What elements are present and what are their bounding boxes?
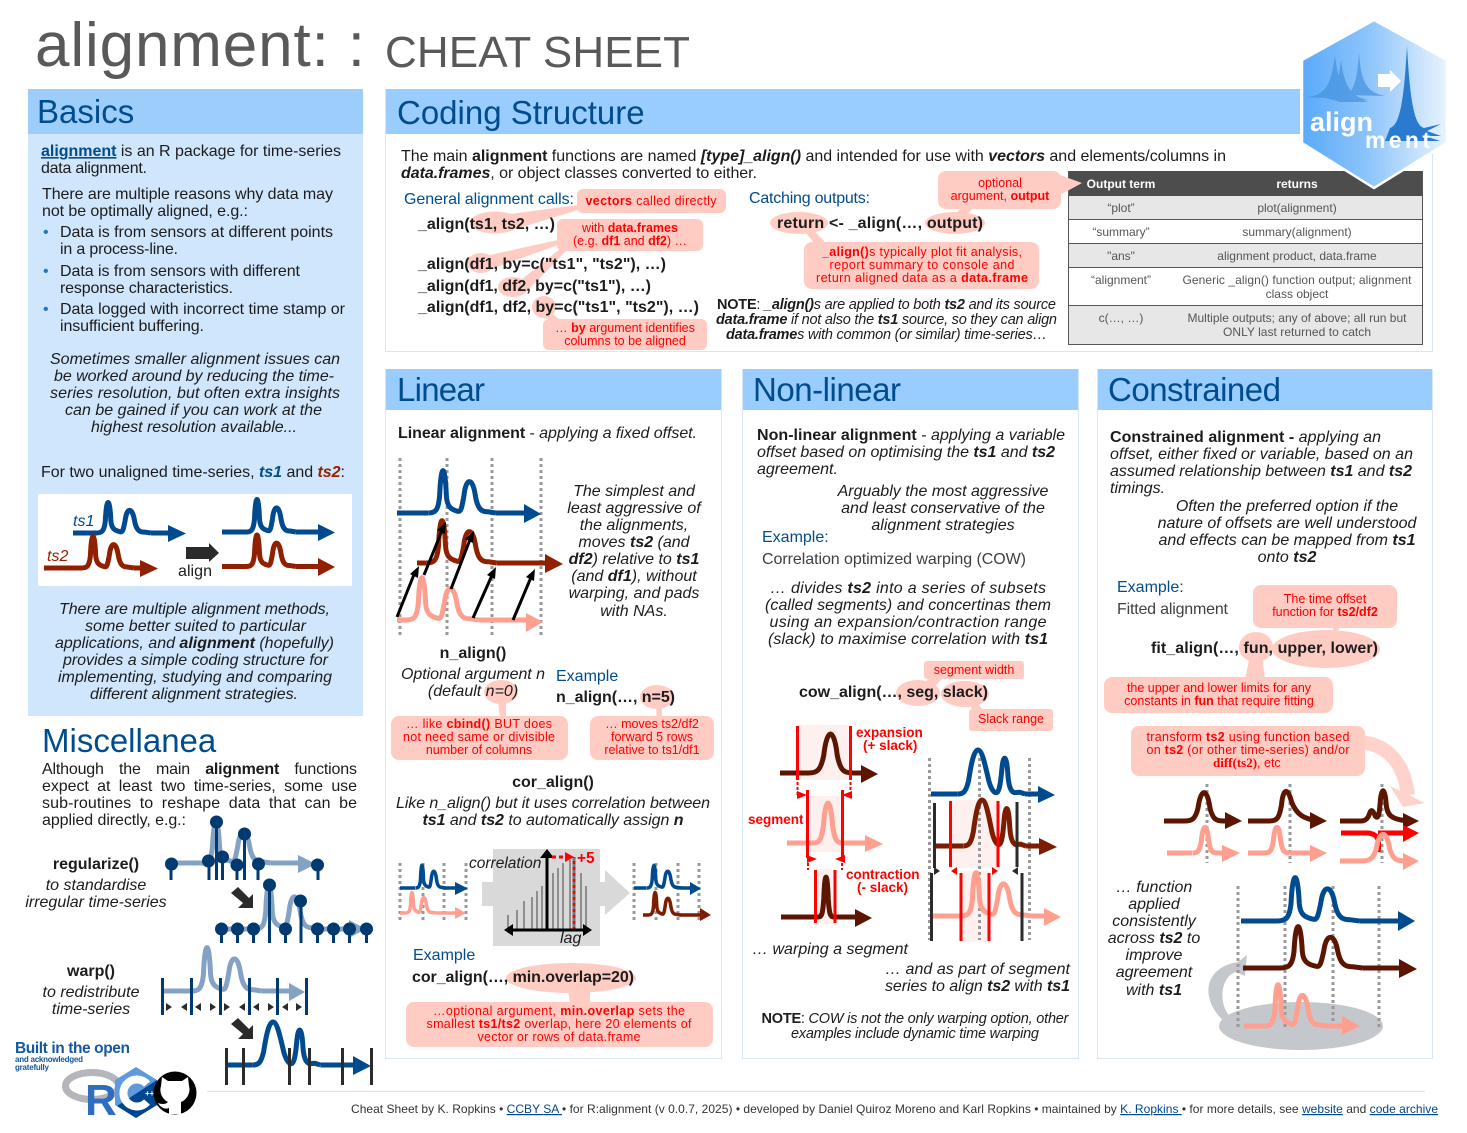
table: output terms: class object: [1266, 287, 1329, 301]
example: cow: [762, 529, 1026, 568]
chart: regularised time-series: [215, 878, 373, 943]
callout: upper and lower limits: constants in fun that require fitting: [1124, 694, 1314, 708]
callout: time offset: [1253, 585, 1397, 628]
text: cor_align: Like n_align() but it uses correlation between: [396, 795, 710, 812]
text: coding intro: data.frames, or object classes converted to either.: [401, 165, 757, 182]
table: output terms: plot(alignment): [1257, 201, 1337, 215]
example: cor_align: Example: [413, 947, 475, 964]
bullet list: reasons: Data logged with incorrect time stamp or: [60, 301, 346, 318]
callout: transform ts2: [1131, 726, 1365, 776]
table: output terms: Multiple outputs; any of above; all run but: [1188, 311, 1407, 325]
text: basics intro: data alignment.: [41, 160, 147, 177]
panel: basics: [28, 89, 363, 716]
text: catching outputs heading: Catching outputs:: [749, 190, 870, 207]
callout: optional argument output: optional: [978, 176, 1022, 190]
callout: upper and lower limits: [1104, 677, 1333, 713]
footer: credits: Cheat Sheet by K. Ropkins • CCBY SA • for R:alignment (v 0.0.7, 2025) • developed by Daniel Quiroz Moreno and Karl Ropkins • maintained by K. Ropkins • for more details, see website and code archive: [351, 1102, 1438, 1116]
text: linear description: moves ts2 (and: [578, 534, 691, 551]
table: output terms: Output term: [1087, 177, 1155, 191]
code: general alignment calls: _align(df1, df2, by=c("ts1"), …): [417, 278, 651, 295]
chart: warping a segment: (+ slack): [863, 738, 917, 753]
callout: slack range: [969, 709, 1053, 731]
text: constrained definition: assumed relationship between ts1 and ts2: [1110, 463, 1412, 480]
text: warp: time-series: [52, 1001, 130, 1018]
text: linear description: warping, and pads: [569, 585, 699, 602]
panel: linear: [386, 369, 722, 1058]
callout: transform ts2: on ts2 (or other time-series) and/or: [1146, 743, 1350, 757]
text: constrained definition: timings.: [1110, 480, 1165, 497]
text: cor_align: [396, 774, 710, 829]
callout: by argument: … by argument identifies: [555, 321, 695, 335]
heading: miscellanea: Miscellanea: [42, 722, 217, 759]
chart: unaligned to aligned: ts1: [73, 513, 94, 530]
text: cor_align: ts1 and ts2 to automatically assign n: [422, 812, 684, 829]
callout: align return: _align()s typically plot fit analysis,: [821, 245, 1022, 259]
callout: moves ts2: forward 5 rows: [611, 730, 693, 744]
text: regularize: [25, 856, 167, 911]
text: linear description: least aggressive of: [567, 500, 702, 517]
text: function applied: with ts1: [1126, 982, 1182, 999]
code: fit_align: fit_align(…, fun, upper, lower): [1151, 640, 1378, 657]
text: general alignment calls heading: General alignment calls:: [404, 191, 574, 208]
text: basics intro: alignment is an R package for time-series: [41, 143, 341, 160]
chart: irregular time-series: [165, 816, 324, 880]
callout: align return: return aligned data as a data.frame: [816, 271, 1028, 285]
text: n_align: [401, 645, 545, 700]
bullet list: reasons: •: [43, 301, 49, 318]
text: warp: [43, 963, 140, 1018]
highlights: fit_align arguments: [1239, 620, 1380, 680]
chart: segment series alignment: [930, 750, 1061, 942]
callout: moves ts2: [590, 716, 714, 760]
text: cow description: (called segments) and concertinas them: [765, 597, 1051, 614]
text: multiple methods: There are multiple alignment methods,: [59, 601, 330, 618]
text: linear description: [567, 483, 702, 620]
text: preferred option: nature of offsets are well understood: [1158, 515, 1418, 532]
callout: min.overlap: [406, 1002, 713, 1047]
text: linear description: The simplest and: [573, 483, 696, 500]
table: output terms: Generic _align() function output; alignment: [1182, 273, 1412, 287]
example: n_align: Example: [556, 668, 618, 685]
text: warping a segment: … warping a segment: [752, 941, 909, 958]
arrow: output callout pointer to table: [1060, 175, 1082, 195]
bullet list: reasons: in a process-line.: [60, 241, 178, 258]
text: cor_align: cor_align(): [512, 774, 594, 791]
text: multiple methods: applications, and alignment (hopefully): [55, 635, 334, 652]
highlights: catching outputs: [770, 205, 985, 245]
callout: time offset: The time offset: [1284, 592, 1367, 606]
text: preferred option: onto ts2: [1258, 549, 1316, 566]
highlights: cow arguments: [896, 676, 989, 712]
chart: time-series before warp: [162, 948, 306, 1015]
text: cow description: [765, 580, 1051, 648]
text: regularize: regularize(): [53, 856, 139, 873]
text: resolution note: highest resolution available...: [91, 419, 297, 436]
arrow: transform to panels: [1360, 742, 1425, 807]
text: most aggressive: and least conservative of the: [841, 500, 1045, 517]
footer rule: [207, 1090, 1425, 1092]
callout: vectors: vectors called directly: [586, 194, 717, 208]
example: cor_align: [412, 947, 634, 986]
bullet list: reasons: insufficient buffering.: [60, 318, 204, 335]
icon: r, c++ and github logos: [66, 1067, 196, 1125]
text: basics intro: not be optimally aligned, e.g.:: [42, 203, 248, 220]
text: part of segment series: [885, 961, 1071, 995]
chart: correlation alignment: correlation: [469, 855, 541, 872]
icon: alignment hex logo: [1302, 20, 1447, 188]
text: most aggressive: Arguably the most aggressive: [837, 483, 1048, 500]
code: general alignment calls: _align(df1, df2, by=c("ts1", "ts2"), …): [417, 299, 699, 316]
text: preferred option: [1158, 498, 1418, 566]
text: multiple methods: provides a simple coding structure for: [62, 652, 329, 669]
panel: coding structure: [386, 89, 1432, 352]
chart: unaligned to aligned: [38, 494, 352, 586]
code: general alignment calls: [417, 216, 699, 316]
example: cow: Example:: [762, 529, 829, 546]
panel: miscellanea: [25, 722, 373, 1085]
panel: non-linear: [742, 369, 1078, 1058]
bullet list: reasons: [43, 224, 346, 335]
table: output terms: c(…, …): [1099, 311, 1143, 325]
icon: arrow down-right: [231, 1018, 253, 1039]
icon: alignment hex logo: align: [1310, 107, 1373, 137]
callout: cbind: [391, 716, 568, 760]
heading: non-linear: Non-linear: [753, 371, 901, 408]
callout: upper and lower limits: the upper and lower limits for any: [1127, 681, 1312, 695]
callout: time offset: function for ts2/df2: [1272, 605, 1378, 619]
chart: transformed ts2: [1164, 784, 1419, 870]
text: function applied: … function: [1116, 879, 1192, 896]
text: built in the open: and acknowledged: [15, 1055, 83, 1064]
text: cow note: [762, 1011, 1070, 1042]
text: resolution note: series resolution, but often extra insights: [50, 385, 340, 402]
callout: slack range: Slack range: [978, 712, 1044, 726]
panel: constrained: [1098, 369, 1432, 1058]
callout: optional argument output: argument, output: [951, 189, 1050, 203]
bullet list: reasons: response characteristics.: [60, 280, 233, 297]
text: cow description: … divides ts2 into a series of subsets: [770, 580, 1046, 597]
callout: min.overlap: …optional argument, min.overlap sets the: [433, 1004, 685, 1018]
highlights: n_align arguments: [484, 680, 674, 718]
text: coding note: data.frames with common (or similar) time-series…: [726, 327, 1047, 343]
title: [35, 11, 690, 80]
callout: align return: [804, 242, 1039, 289]
text: function applied: [1108, 879, 1200, 999]
text: multiple methods: implementing, studying and comparing: [58, 669, 332, 686]
text: n_align: n_align(): [440, 645, 506, 662]
callout: moves ts2: relative to ts1/df1: [604, 743, 700, 757]
table: output terms: “plot”: [1107, 201, 1135, 215]
table: output terms: alignment product, data.frame: [1217, 249, 1377, 263]
text: built in the open: gratefully: [15, 1063, 50, 1072]
text: cow description: (slack) to maximise correlation with ts1: [768, 631, 1048, 648]
callout: cbind: not need same or divisible: [403, 730, 555, 744]
text: built in the open: Built in the open: [15, 1040, 130, 1057]
text: basics intro: [41, 143, 341, 220]
chart: unaligned to aligned: align: [178, 563, 212, 580]
callout: align return: report summary to console and: [830, 258, 1015, 272]
chart: warping a segment: contraction: [846, 867, 920, 882]
callout: vectors: [577, 189, 726, 213]
text: linear description: the alignments,: [580, 517, 688, 534]
text: non-linear definition: agreement.: [757, 461, 838, 478]
code: catching outputs: return <- _align(…, output): [777, 215, 983, 232]
chart: warping a segment: segment: [748, 812, 804, 827]
callout: cbind: … like cbind() BUT does: [406, 717, 552, 731]
text: resolution note: [50, 351, 340, 436]
chart: warping a segment: (- slack): [857, 880, 908, 895]
bullet list: reasons: Data is from sensors with different: [60, 263, 301, 280]
text: most aggressive: alignment strategies: [871, 517, 1015, 534]
text: coding note: [716, 297, 1057, 343]
heading: basics: Basics: [37, 93, 134, 130]
callout: cbind: number of columns: [426, 743, 532, 757]
text: n_align: Optional argument n: [401, 666, 545, 683]
example: n_align: [556, 668, 675, 706]
callout: moves ts2: … moves ts2/df2: [605, 717, 699, 731]
example: fitted alignment: Fitted alignment: [1117, 601, 1229, 618]
callout: data.frames: with data.frames: [581, 221, 678, 235]
text: linear description: (and df1), without: [571, 568, 697, 585]
title: CHEAT SHEET: [385, 28, 690, 77]
text: cow note: NOTE: COW is not the only warping option, other: [762, 1011, 1070, 1027]
heading: constrained: Constrained: [1108, 371, 1281, 408]
text: non-linear definition: Non-linear alignment - applying a variable: [757, 427, 1065, 444]
text: multiple methods: [55, 601, 334, 703]
text: miscellanea intro: expect at least two time-series, some use: [42, 778, 357, 795]
text: coding note: data.frame if not also the ts1 source, so they can align: [716, 312, 1057, 328]
code: general alignment calls: _align(ts1, ts2, …): [417, 216, 555, 233]
text: function applied: improve: [1126, 947, 1183, 964]
text: basics intro: There are multiple reasons why data may: [42, 186, 333, 203]
text: n_align: (default n=0): [428, 683, 518, 700]
text: built in the open: [15, 1040, 130, 1072]
callout: segment width: [924, 661, 1024, 679]
text: cow note: examples include dynamic time warping: [791, 1026, 1039, 1042]
callout: transform ts2: transform ts2 using function based: [1146, 730, 1350, 744]
text: two unaligned series: For two unaligned time-series, ts1 and ts2:: [41, 464, 345, 481]
text: multiple methods: different alignment strategies.: [90, 686, 298, 703]
text: coding intro: The main alignment functions are named [type]_align() and intended for use with vectors and elements/columns in: [401, 148, 1226, 165]
text: function applied: applied: [1128, 896, 1181, 913]
chart: linear offset: [397, 458, 563, 635]
table: output terms: ONLY last returned to catch: [1223, 325, 1371, 339]
table: output terms: [1068, 171, 1422, 345]
callout: optional argument output: [938, 171, 1061, 209]
example: n_align: n_align(…, n=5): [556, 689, 675, 706]
heading: coding structure: Coding Structure: [397, 94, 645, 131]
text: part of segment series: … and as part of segment: [885, 961, 1071, 978]
text: linear description: df2) relative to ts1: [569, 551, 699, 568]
code: cow_align: cow_align(…, seg, slack): [799, 684, 988, 701]
icon: alignment hex logo: ment: [1365, 127, 1430, 153]
chart: correlation alignment: lag: [560, 930, 581, 947]
text: resolution note: Sometimes smaller alignment issues can: [50, 351, 340, 368]
chart: function applied consistently: [1208, 878, 1417, 1050]
text: regularize: to standardise: [46, 877, 146, 894]
bullet list: reasons: •: [43, 263, 49, 280]
callout: segment width: segment width: [934, 663, 1014, 677]
chart: correlation alignment: +5: [577, 850, 595, 867]
example: cor_align: cor_align(…, min.overlap=20): [412, 969, 634, 986]
text: miscellanea intro: applied directly, e.g.:: [42, 812, 186, 829]
text: linear definition: Linear alignment - applying a fixed offset.: [398, 425, 697, 442]
code: general alignment calls: _align(df1, by=c("ts1", "ts2"), …): [417, 256, 666, 273]
callout: by argument: columns to be aligned: [564, 334, 686, 348]
chart: unaligned to aligned: ts2: [47, 548, 68, 565]
chart: warping a segment: expansion: [856, 725, 923, 740]
text: resolution note: be worked around by reducing the time-: [54, 368, 334, 385]
text: function applied: across ts2 to: [1108, 930, 1200, 947]
example: fitted alignment: [1117, 579, 1229, 618]
bullet list: reasons: •: [43, 224, 49, 241]
text: constrained definition: offset, either fixed or variable, based on an: [1110, 446, 1413, 463]
callout: by argument: [543, 319, 707, 350]
text: most aggressive: [837, 483, 1048, 534]
text: preferred option: Often the preferred option if the: [1176, 498, 1398, 515]
bullet list: reasons: Data is from sensors at different points: [60, 224, 333, 241]
table: output terms: returns: [1276, 177, 1318, 191]
callout: transform ts2: diff(ts2), etc: [1213, 755, 1281, 770]
text: warp: to redistribute: [43, 984, 140, 1001]
table: output terms: “alignment”: [1091, 273, 1151, 287]
text: coding intro: [401, 148, 1226, 182]
text: coding note: NOTE: _align()s are applied to both ts2 and its source: [717, 297, 1056, 313]
callout: min.overlap: vector or rows of data.frame: [478, 1030, 641, 1044]
text: miscellanea intro: Although the main alignment functions: [42, 761, 357, 778]
text: non-linear definition: [757, 427, 1065, 478]
text: miscellanea intro: [42, 761, 357, 829]
highlight: min.overlap: [506, 963, 636, 1004]
chart: correlation alignment: [400, 849, 711, 947]
icon: arrow down-right: [231, 887, 253, 908]
text: resolution note: can be gained if you can work at the: [65, 402, 322, 419]
icon: r, c++ and github logos: R: [85, 1076, 117, 1125]
highlights: general calls arguments: [467, 205, 578, 322]
text: linear description: with NAs.: [600, 603, 668, 620]
text: constrained definition: [1110, 429, 1413, 497]
text: multiple methods: some better suited to particular: [85, 618, 307, 635]
example: cow: Correlation optimized warping (COW): [762, 551, 1026, 568]
text: function applied: agreement: [1116, 964, 1193, 981]
text: function applied: consistently: [1112, 913, 1197, 930]
text: non-linear definition: offset based on optimising the ts1 and ts2: [757, 444, 1055, 461]
text: part of segment series: series to align ts2 with ts1: [885, 978, 1070, 995]
text: constrained definition: Constrained alignment - applying an: [1110, 429, 1381, 446]
callout: data.frames: [557, 219, 703, 251]
table: output terms: summary(alignment): [1242, 225, 1352, 239]
chart: warping a segment: [748, 725, 923, 927]
callout: min.overlap: smallest ts1/ts2 overlap, here 20 elements of: [426, 1017, 692, 1031]
text: preferred option: and effects can be mapped from ts1: [1158, 532, 1416, 549]
table: output terms: "ans": [1107, 249, 1135, 263]
icon: r, c++ and github logos: ++: [145, 1089, 155, 1098]
text: regularize: irregular time-series: [25, 894, 167, 911]
heading: linear: Linear: [397, 371, 485, 408]
text: cow description: using an expansion/contraction range: [770, 614, 1047, 631]
callout: data.frames: (e.g. df1 and df2) …: [573, 234, 687, 248]
example: fitted alignment: Example:: [1117, 579, 1184, 596]
text: miscellanea intro: sub-routines to reshape data that can be: [42, 795, 357, 812]
title: alignment: :: [35, 11, 365, 80]
chart: warped time-series: [226, 1022, 372, 1085]
text: warp: warp(): [66, 963, 115, 980]
table: output terms: “summary”: [1092, 225, 1150, 239]
